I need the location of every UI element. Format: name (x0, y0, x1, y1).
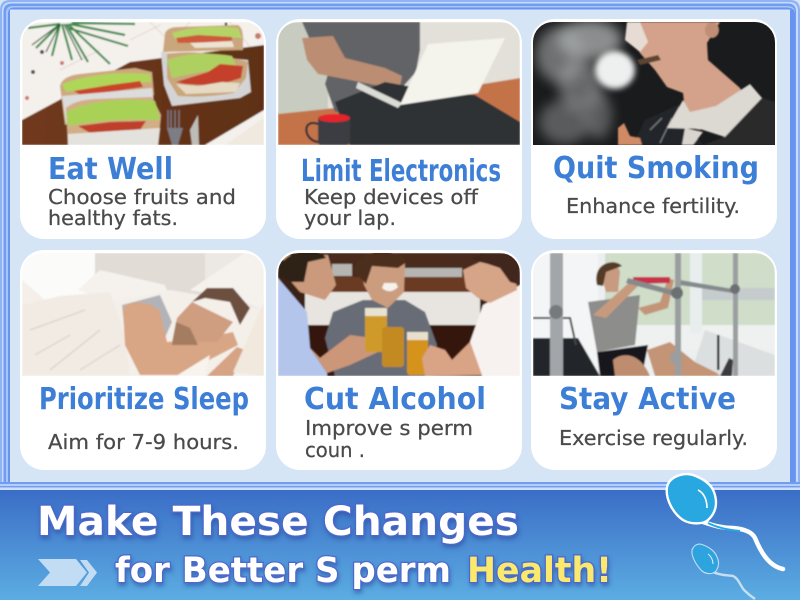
photo: sandwiches on a wooden board (22, 22, 264, 145)
icon: large sperm (667, 474, 783, 569)
card: Prioritize Sleep (20, 250, 266, 470)
heading: Stay Active (559, 382, 736, 417)
heading: Limit Electronics (301, 154, 501, 189)
card: Cut Alcohol (276, 250, 522, 470)
body text: coun . (305, 438, 365, 462)
photo: man exercising in gym (533, 253, 775, 376)
body text: Choose fruits and (48, 185, 236, 209)
footer banner (0, 474, 800, 600)
footer title line 2 (115, 551, 612, 591)
photo: man with laptop on lap (278, 22, 520, 145)
heading: Cut Alcohol (304, 382, 486, 417)
heading: Eat Well (48, 152, 173, 187)
body text: Keep devices off (304, 185, 479, 209)
body text: Exercise regularly. (559, 426, 748, 450)
sandwich 2 (161, 52, 251, 106)
photo: three men toasting with beer (278, 251, 520, 376)
footer title line 2: Health! (467, 551, 612, 591)
sandwich 1 (163, 25, 243, 52)
heading: Quit Smoking (553, 151, 759, 186)
photo: person exhaling smoke (533, 20, 775, 145)
footer title line 2: for Better S perm (115, 551, 451, 591)
body text (48, 185, 236, 230)
photo: man sleeping in bed (22, 253, 264, 376)
card: Stay Active (531, 250, 777, 470)
body text: your lap. (304, 206, 396, 230)
card: Limit Electronics (276, 19, 522, 239)
body text: Aim for 7-9 hours. (48, 430, 239, 454)
body text (304, 185, 479, 230)
body text: healthy fats. (48, 206, 178, 230)
body text: Enhance fertility. (566, 194, 740, 218)
footer title line 1: Make These Changes (37, 499, 519, 545)
sandwich 3 (60, 68, 154, 125)
sandwich 4 (66, 97, 161, 145)
card: Quit Smoking (531, 19, 777, 239)
chevron arrow icon (38, 559, 97, 586)
icon: small sperm (692, 544, 755, 599)
card: Eat Well (20, 19, 266, 239)
heading: Prioritize Sleep (39, 382, 249, 417)
body text: Improve s perm (305, 416, 473, 440)
body text (305, 416, 473, 462)
